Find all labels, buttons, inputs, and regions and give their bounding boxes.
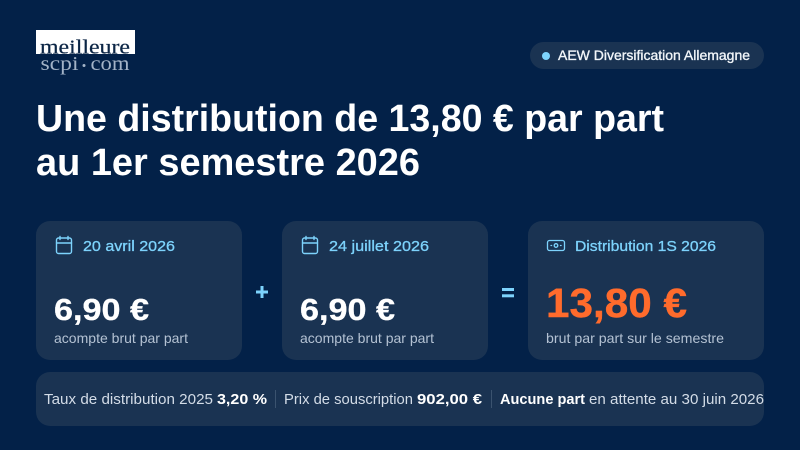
label: Distribution 1S 2026 <box>575 238 716 255</box>
title <box>36 98 664 184</box>
caption: acompte brut par part <box>54 330 188 346</box>
date label: 20 avril 2026 <box>83 238 175 255</box>
badge: fund name <box>530 42 764 69</box>
caption: acompte brut par part <box>300 330 434 346</box>
total amount: 13,80 € <box>546 280 687 326</box>
fact: distribution rate: Taux de distribution 2025 <box>44 391 213 408</box>
title: Une distribution de 13,80 € par part <box>36 98 664 140</box>
amount: 6,90 € <box>54 292 149 327</box>
fact: pending shares: en attente au 30 juin 2026 <box>589 391 764 408</box>
icon: banknote <box>548 240 564 250</box>
panel: key facts bar <box>36 372 764 426</box>
panel: second instalment <box>282 221 488 360</box>
panel: first instalment <box>36 221 242 360</box>
operator: equals <box>502 288 514 297</box>
panel: total distribution <box>528 221 764 360</box>
badge: fund name: AEW Diversification Allemagne <box>558 47 750 63</box>
fact: subscription price <box>284 391 483 408</box>
caption: brut par part sur le semestre <box>546 330 724 346</box>
logo: meilleure scpi.com: scpi <box>40 53 79 75</box>
fact: distribution rate: 3,20 % <box>217 391 267 408</box>
logo: meilleure scpi.com <box>36 30 135 75</box>
fact: pending shares <box>500 391 764 408</box>
icon: calendar <box>302 236 318 254</box>
fact: pending shares: Aucune part <box>500 391 585 408</box>
title: au 1er semestre 2026 <box>36 142 420 184</box>
fact: subscription price: Prix de souscription <box>284 391 413 408</box>
logo: meilleure scpi.com: com <box>90 53 130 75</box>
date label: 24 juillet 2026 <box>329 238 429 255</box>
icon: calendar <box>56 236 72 254</box>
fact: subscription price: 902,00 € <box>417 391 483 408</box>
operator: plus <box>256 286 268 298</box>
amount: 6,90 € <box>300 292 395 327</box>
logo: meilleure scpi.com: meilleure <box>40 36 130 58</box>
